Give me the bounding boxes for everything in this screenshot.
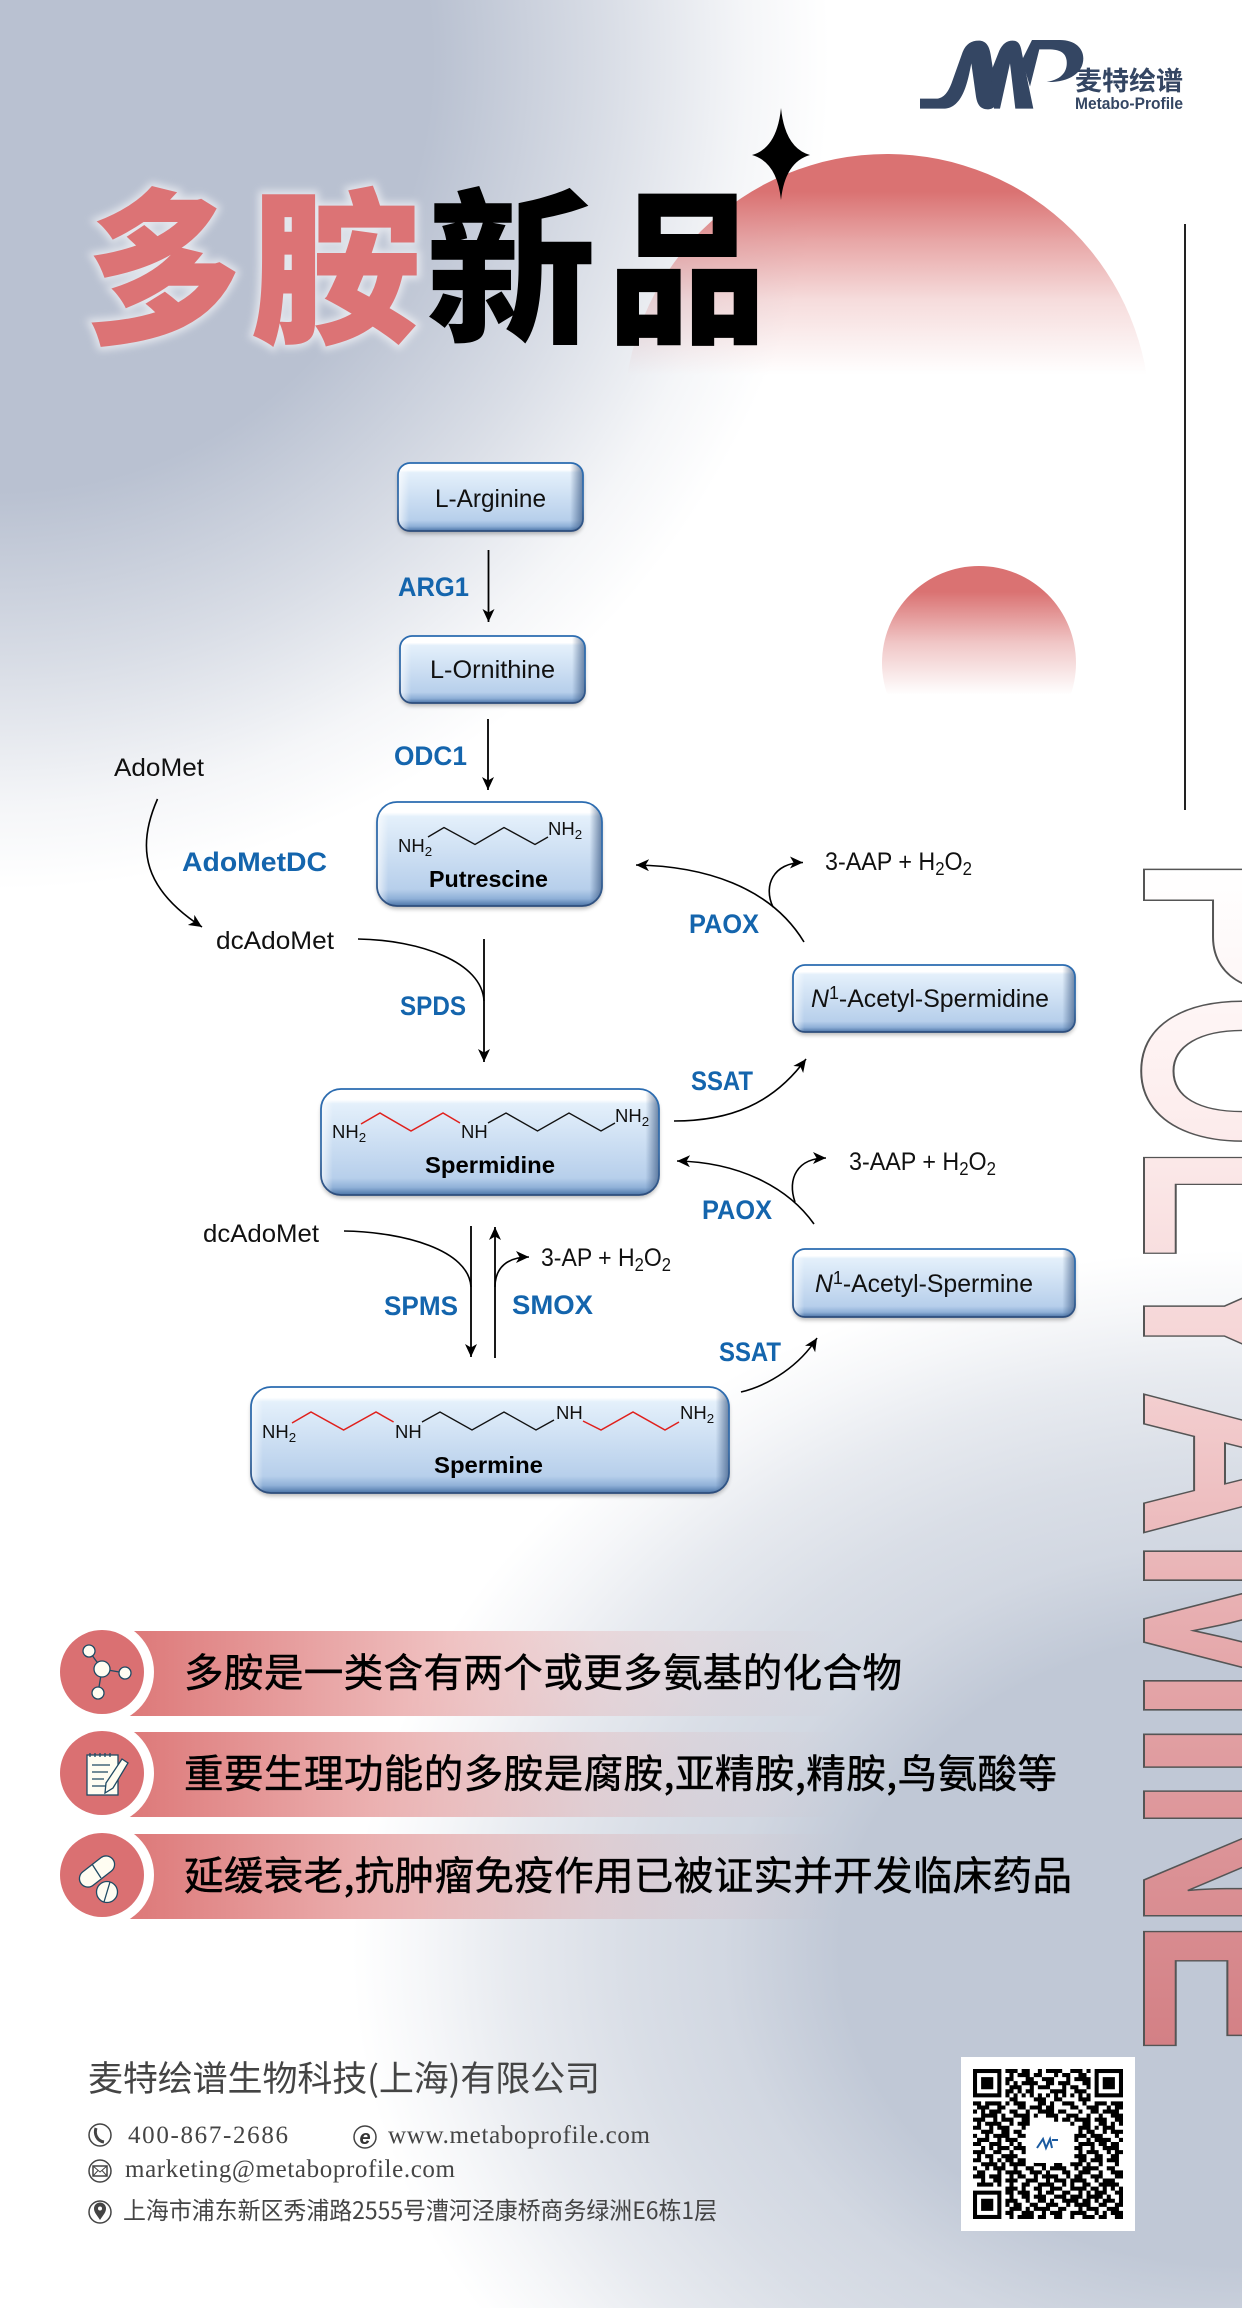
enzyme label SPMS: SPMS bbox=[384, 1291, 458, 1321]
label 3-AAP + H2O2 upper: 2 bbox=[963, 859, 972, 879]
enzyme label AdoMetDC: AdoMetDC bbox=[182, 847, 327, 877]
box: Spermine: NH bbox=[680, 1402, 707, 1423]
arrow: spermidine to N1-acetyl-spermidine bbox=[674, 1059, 806, 1121]
title: 多胺新品: 胺 bbox=[251, 137, 421, 379]
enzyme label SMOX: SMOX bbox=[512, 1290, 593, 1320]
QR code bbox=[961, 2057, 1135, 2231]
label 3-AAP + H2O2 lower: 2 bbox=[987, 1159, 996, 1179]
banner 2 bbox=[50, 1721, 1057, 1825]
icon: pills bbox=[76, 1852, 118, 1902]
arrow: AdoMet to dcAdoMet bbox=[146, 799, 202, 927]
label dcAdoMet lower: dcAdoMet bbox=[203, 1220, 319, 1248]
box: Spermine: NH bbox=[395, 1421, 422, 1442]
enzyme label PAOX upper: PAOX bbox=[689, 909, 759, 939]
label 3-AAP + H2O2 upper: 3-AAP + H bbox=[825, 848, 943, 876]
icon: web bbox=[354, 2126, 376, 2149]
logo: Metabo-Profile: 麦特绘谱 bbox=[1075, 61, 1183, 98]
box: Spermidine bbox=[321, 1089, 659, 1198]
box: Putrescine: 2 bbox=[425, 844, 432, 859]
box: N1-Acetyl-Spermidine: -Acetyl-Spermidine bbox=[839, 985, 1049, 1013]
icon: location pin bbox=[89, 2201, 111, 2223]
enzyme label SSAT upper: SSAT bbox=[691, 1066, 753, 1096]
box: Spermidine: 2 bbox=[359, 1130, 366, 1145]
icon: mail bbox=[89, 2160, 111, 2182]
box: N1-Acetyl-Spermine: -Acetyl-Spermine bbox=[843, 1270, 1033, 1298]
decorative circle: small red semicircle bbox=[882, 566, 1076, 760]
box: Spermine: NH bbox=[262, 1421, 289, 1442]
label 3-AAP + H2O2 upper: O bbox=[945, 848, 963, 876]
box: Spermidine: Spermidine bbox=[425, 1152, 555, 1178]
label 3-AP + H2O2: 3-AP + H bbox=[541, 1244, 643, 1272]
box: Spermine bbox=[251, 1387, 729, 1496]
title: 多胺新品: 多 bbox=[86, 137, 241, 379]
arrow: spermine to N1-acetyl-spermine bbox=[741, 1338, 817, 1392]
title: 多胺新品: 新 bbox=[426, 137, 596, 379]
box: N1-Acetyl-Spermine: 1 bbox=[833, 1268, 843, 1288]
banner 3 bbox=[50, 1823, 1072, 1927]
logo: Metabo-Profile: Metabo-Profile bbox=[1075, 94, 1183, 113]
box: Spermine: Spermine bbox=[434, 1452, 543, 1478]
box: L-Ornithine: L-Ornithine bbox=[430, 656, 555, 684]
arrow: SMOX by-product branch bbox=[495, 1257, 529, 1287]
arrow: spermidine to spermine bbox=[470, 1226, 472, 1357]
label 3-AAP + H2O2 upper: 2 bbox=[935, 859, 945, 879]
box: Putrescine: 2 bbox=[575, 827, 582, 842]
arrow: arginine to ornithine bbox=[488, 550, 490, 622]
icon: phone bbox=[89, 2124, 111, 2146]
box: N1-Acetyl-Spermidine bbox=[793, 965, 1075, 1035]
label 3-AAP + H2O2 lower: O bbox=[969, 1148, 987, 1176]
label 3-AP + H2O2: O bbox=[644, 1244, 662, 1272]
label AdoMet: AdoMet bbox=[114, 754, 204, 782]
decorative circle: large red semicircle bbox=[624, 154, 1150, 680]
footer: email: marketing@metaboprofile.com bbox=[125, 2156, 456, 2183]
banner 1 bbox=[50, 1620, 902, 1724]
vertical rule bbox=[1184, 224, 1186, 810]
label 3-AP + H2O2: 2 bbox=[635, 1255, 644, 1275]
icon: four-point star bbox=[752, 108, 810, 200]
enzyme label SPDS: SPDS bbox=[400, 991, 466, 1021]
label 3-AAP + H2O2 lower: 3-AAP + H bbox=[849, 1148, 967, 1176]
arrow: upper PAOX by-product branch bbox=[769, 862, 803, 907]
label 3-AAP + H2O2 lower: 2 bbox=[959, 1159, 969, 1179]
enzyme label ODC1: ODC1 bbox=[394, 741, 467, 771]
box: Putrescine: NH bbox=[398, 835, 425, 856]
footer: phone number: 400-867-2686 bbox=[128, 2122, 288, 2149]
box: Putrescine bbox=[377, 802, 602, 909]
title: 多胺新品: 胺 bbox=[251, 137, 421, 379]
arrow: ornithine to putrescine bbox=[487, 719, 489, 790]
title: 多胺新品: 多 bbox=[86, 137, 241, 379]
arrow: putrescine to spermidine bbox=[483, 939, 485, 1062]
label dcAdoMet upper: dcAdoMet bbox=[216, 927, 334, 955]
banner 3: 延缓衰老,抗肿瘤免疫作用已被证实并开发临床药品 bbox=[184, 1845, 1072, 1902]
box: Putrescine: NH bbox=[548, 818, 575, 839]
banner 2: 重要生理功能的多胺是腐胺,亚精胺,精胺,鸟氨酸等 bbox=[184, 1743, 1057, 1800]
icon: web: e bbox=[359, 2127, 371, 2149]
box: Spermidine: NH bbox=[332, 1121, 359, 1142]
arrow: N1-acetyl-spermine to spermidine bbox=[677, 1161, 814, 1224]
box: Spermidine: 2 bbox=[642, 1114, 649, 1129]
icon: molecule nodes bbox=[83, 1645, 131, 1699]
box: Putrescine: Putrescine bbox=[429, 866, 548, 892]
arrow: lower PAOX by-product branch bbox=[792, 1158, 826, 1202]
box: Spermidine: NH bbox=[615, 1105, 642, 1126]
banner 1: 多胺是一类含有两个或更多氨基的化合物 bbox=[184, 1642, 902, 1699]
logo: Metabo-Profile bbox=[920, 40, 1183, 113]
box: N1-Acetyl-Spermidine: 1 bbox=[829, 983, 839, 1003]
box: Spermine: NH bbox=[556, 1402, 583, 1423]
icon: notepad and pencil bbox=[87, 1753, 128, 1795]
box: L-Arginine: L-Arginine bbox=[435, 485, 546, 513]
title: 多胺新品 bbox=[86, 137, 767, 379]
arrow: N1-acetyl-spermidine to putrescine bbox=[636, 865, 804, 942]
arrow: dcAdoMet joins SPDS bbox=[358, 939, 484, 1001]
footer: website: www.metaboprofile.com bbox=[388, 2122, 651, 2149]
vertical word POLYAMINE bbox=[1083, 855, 1242, 2053]
arrow: dcAdoMet joins SPMS bbox=[344, 1231, 471, 1287]
footer: company name: 麦特绘谱生物科技(上海)有限公司 bbox=[88, 2051, 600, 2102]
box: L-Arginine bbox=[398, 463, 583, 534]
enzyme label SSAT lower: SSAT bbox=[719, 1337, 781, 1367]
enzyme label ARG1: ARG1 bbox=[398, 572, 469, 602]
box: L-Ornithine bbox=[400, 636, 585, 706]
footer: address: 上海市浦东新区秀浦路2555号漕河泾康桥商务绿洲E6栋1层 bbox=[123, 2191, 717, 2226]
enzyme label PAOX lower: PAOX bbox=[702, 1195, 772, 1225]
box: N1-Acetyl-Spermine bbox=[793, 1249, 1075, 1320]
arrow: spermine to spermidine bbox=[494, 1227, 496, 1358]
box: Spermidine: NH bbox=[461, 1121, 488, 1142]
box: N1-Acetyl-Spermine: N bbox=[815, 1270, 834, 1298]
title: 多胺新品: 品 bbox=[607, 137, 767, 379]
box: Spermine: 2 bbox=[707, 1411, 714, 1426]
label 3-AP + H2O2: 2 bbox=[662, 1255, 671, 1275]
box: Spermine: 2 bbox=[289, 1430, 296, 1445]
box: N1-Acetyl-Spermidine: N bbox=[811, 985, 830, 1013]
